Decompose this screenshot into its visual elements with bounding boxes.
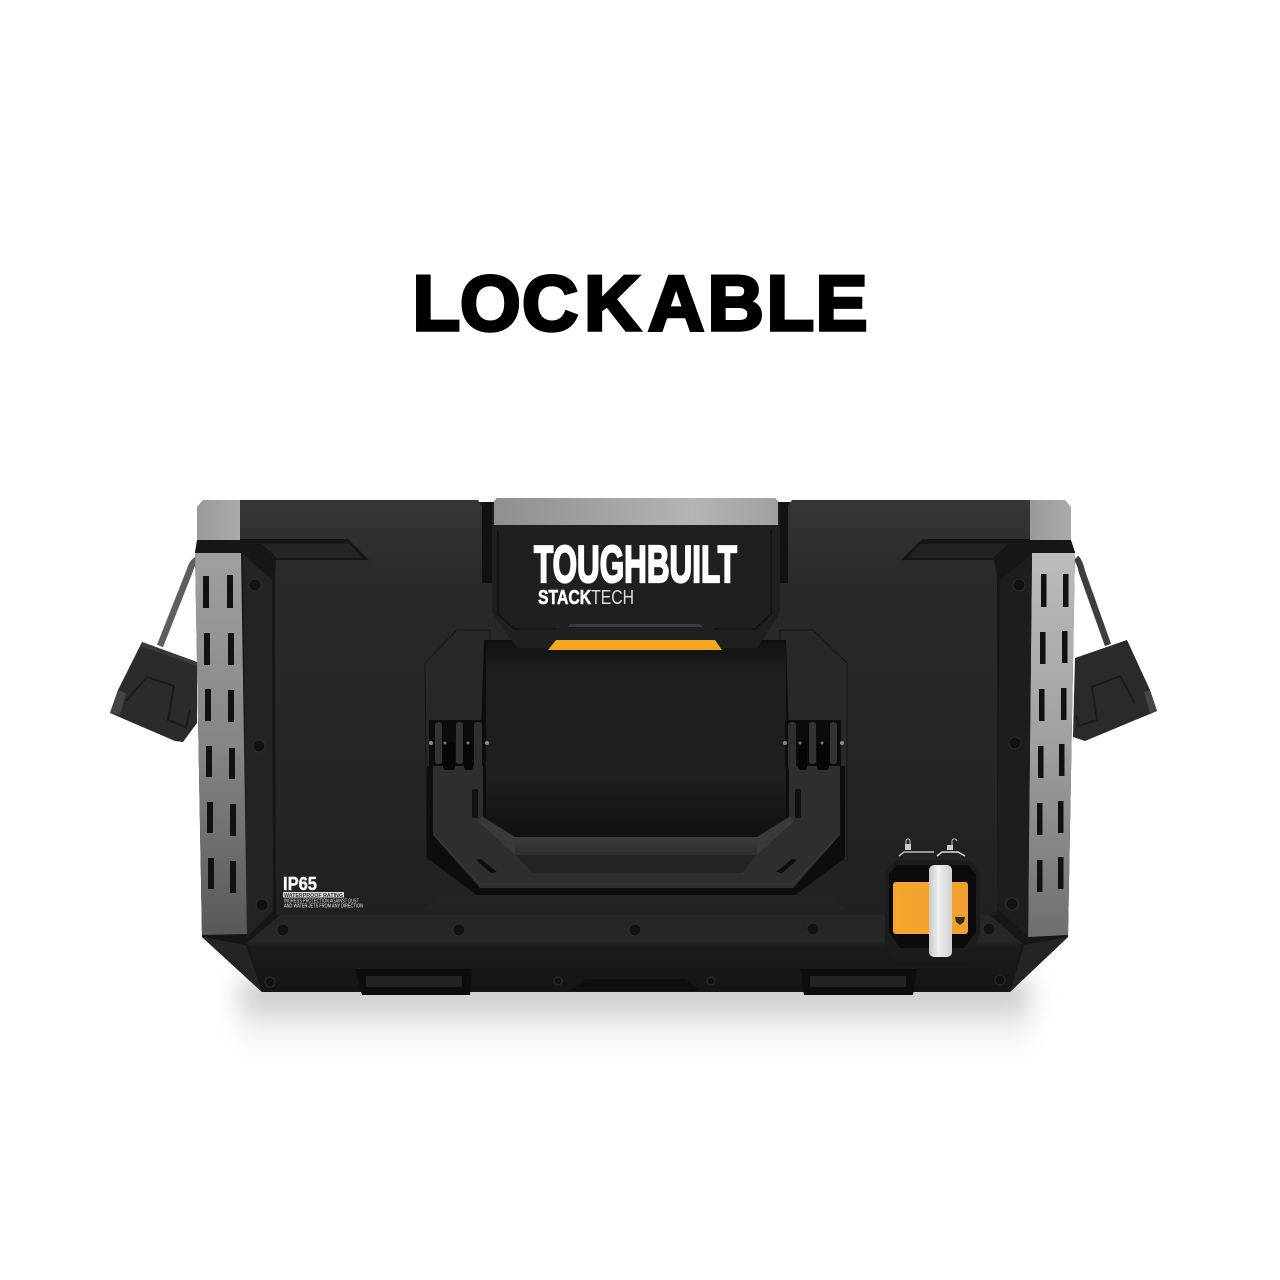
floor shadow bbox=[240, 982, 1030, 1054]
lid: left bbox=[197, 500, 482, 575]
steel side panel: right bbox=[1028, 553, 1075, 937]
left dark corner strip bbox=[243, 554, 273, 937]
lower base band bbox=[247, 915, 1022, 990]
IP65 rating label: IP65 bbox=[283, 874, 317, 894]
center notch bbox=[570, 979, 700, 991]
handle mount: right bbox=[780, 630, 847, 860]
bottom wedge left bbox=[202, 937, 262, 992]
inner panel bbox=[486, 642, 786, 838]
lid: right bbox=[788, 500, 1071, 575]
strap slot left bbox=[262, 544, 362, 558]
IP65 rating label: INGRESS PROTECTION AGAINST DUST bbox=[284, 898, 359, 904]
logo wordmark: TOUGHBUILT bbox=[534, 536, 737, 594]
lid center gap bbox=[482, 503, 788, 583]
strap slot right bbox=[908, 544, 1008, 558]
lower face strip bbox=[425, 895, 845, 910]
logo sub-brand: STACKTECH bbox=[538, 586, 634, 609]
handle mount: left bbox=[425, 630, 490, 860]
main face bbox=[275, 560, 997, 915]
center lid with logo bbox=[492, 498, 780, 648]
bottom wedge right bbox=[1010, 937, 1068, 992]
lock status icons bbox=[899, 839, 965, 856]
yellow accent stripe bbox=[548, 640, 722, 650]
foot: right bbox=[800, 969, 917, 995]
padlock: right bbox=[1073, 558, 1157, 741]
hinge: left bbox=[429, 720, 489, 770]
screws bbox=[249, 579, 1025, 987]
right dark corner strip bbox=[997, 554, 1032, 937]
steel side panel: left bbox=[195, 553, 247, 935]
toolbox body bbox=[195, 502, 1075, 992]
padlock: left bbox=[110, 559, 198, 742]
IP65 rating label bbox=[283, 874, 363, 910]
IP65 rating label: WATERPROOF RATING bbox=[284, 893, 343, 899]
lock mechanism bbox=[885, 860, 980, 962]
hinge: right bbox=[783, 720, 844, 770]
foot: left bbox=[355, 969, 472, 995]
IP65 rating label: AND WATER JETS FROM ANY DIRECTION bbox=[284, 904, 363, 910]
carry handle bbox=[433, 765, 840, 888]
title: LOCKABLE bbox=[412, 259, 868, 347]
handle recess bbox=[427, 640, 845, 895]
